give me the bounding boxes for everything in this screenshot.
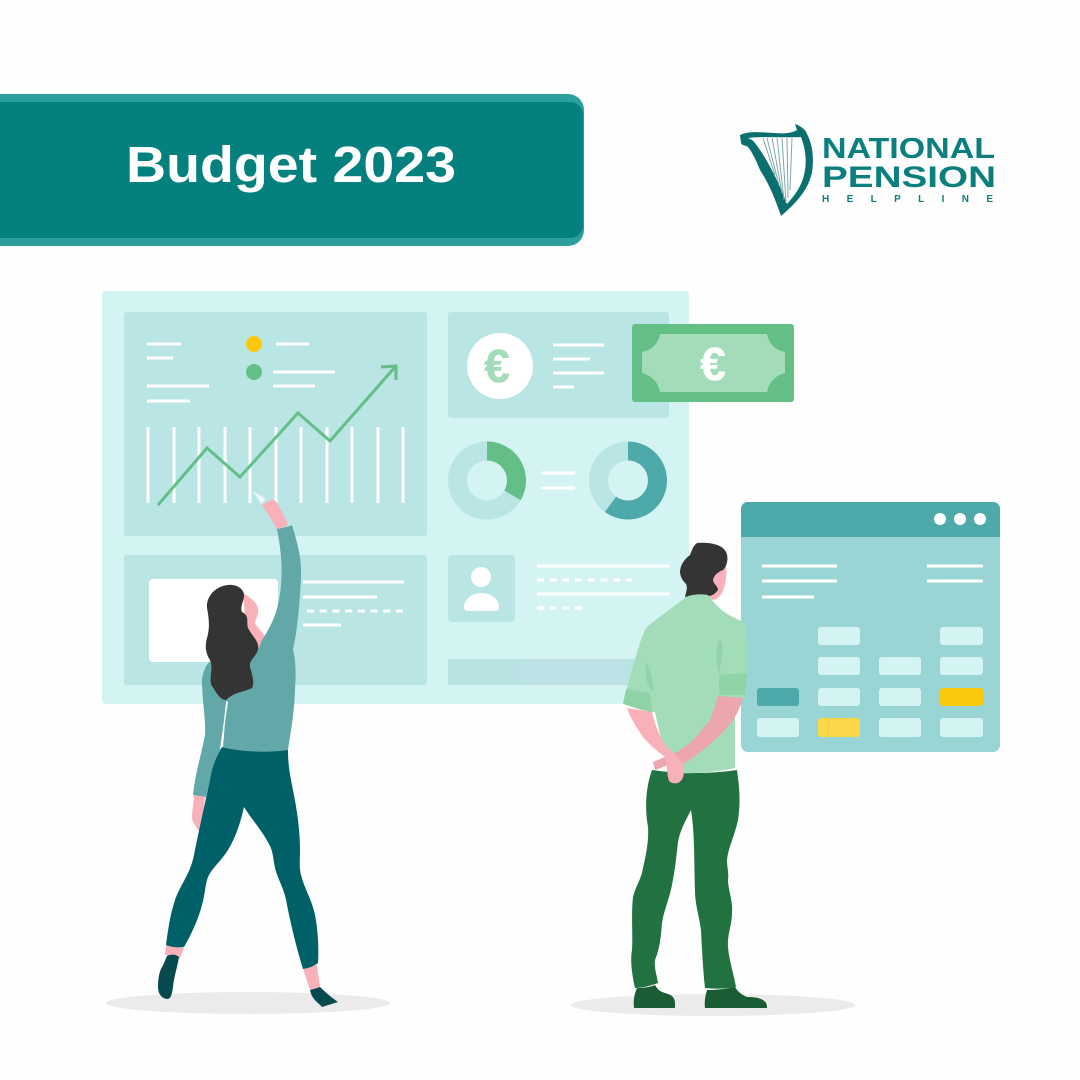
- icon: euro coin: €: [484, 340, 510, 392]
- icon: euro banknote: €: [700, 338, 726, 390]
- icon: euro banknote: [632, 324, 794, 402]
- panel: euro summary: [448, 312, 669, 418]
- chart line with arrow: [158, 366, 396, 505]
- heading: Budget 2023: [126, 136, 456, 193]
- title banner: [0, 94, 584, 246]
- icon: person: [464, 567, 499, 611]
- panel: text card with image: [124, 555, 427, 685]
- panel: line chart: [124, 312, 427, 536]
- panel: calculator: [741, 502, 1000, 752]
- panel: dashboard: [102, 291, 689, 704]
- legend dots: [246, 336, 262, 380]
- progress bar: [448, 659, 669, 685]
- wordmark: NATIONAL: [822, 133, 995, 165]
- man figure: [623, 543, 767, 1008]
- window dots: [934, 513, 986, 525]
- logo: National Pension Helpline: [740, 124, 996, 216]
- panel: profile card: [448, 555, 669, 622]
- logo: National Pension Helpline: HELPLINE: [822, 194, 993, 205]
- ground shadow: man: [571, 994, 855, 1016]
- icon: euro coin: [467, 333, 533, 399]
- donut chart: green: [458, 451, 516, 510]
- icon: harp: [740, 124, 813, 216]
- calculator buttons: [757, 627, 983, 737]
- donut chart: teal: [598, 451, 658, 510]
- logo: National Pension Helpline: PENSION: [822, 161, 996, 194]
- woman figure: [158, 491, 338, 1007]
- ground shadow: woman: [106, 992, 390, 1014]
